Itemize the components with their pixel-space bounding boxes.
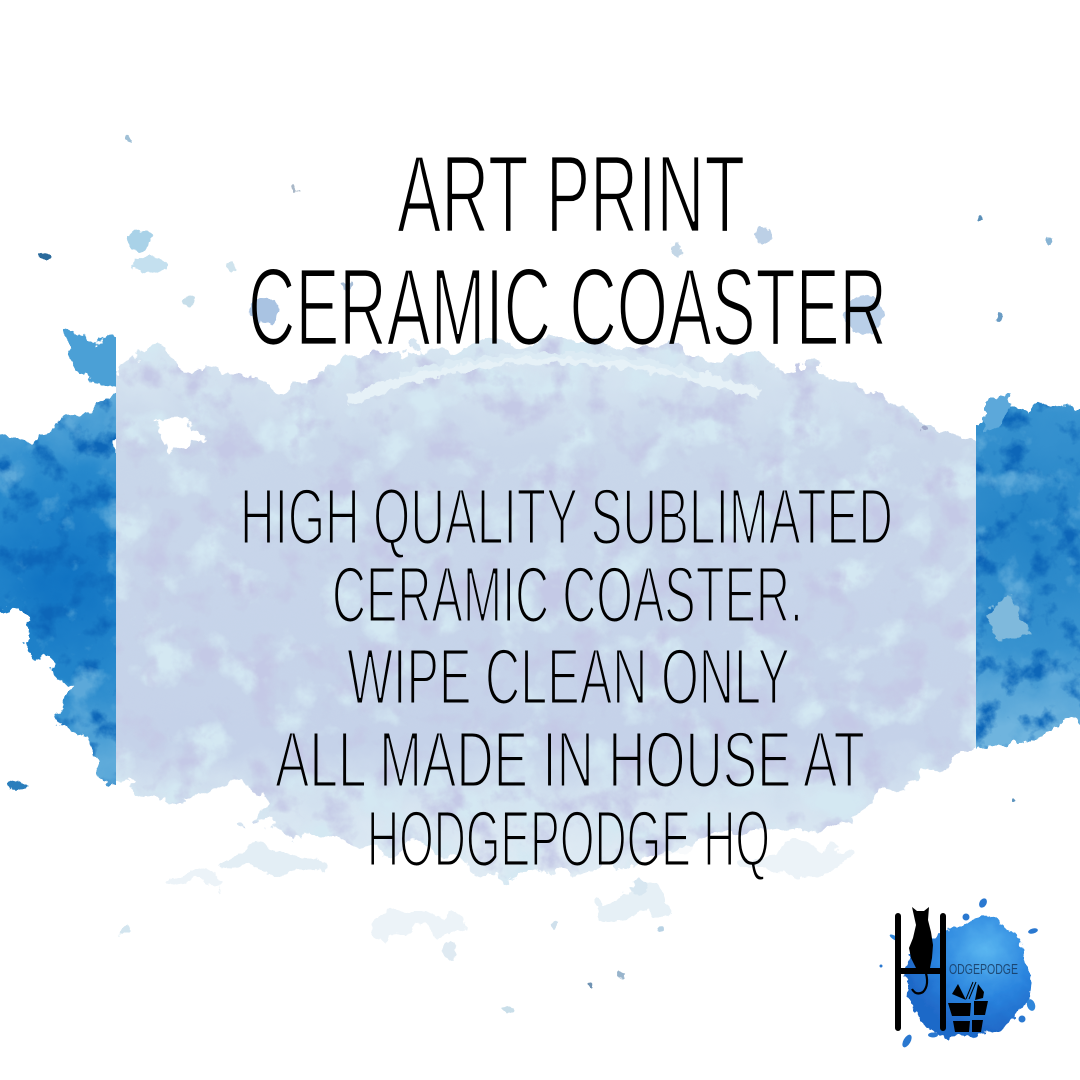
body text block: WIPE CLEAN ONLY [347, 632, 790, 721]
body text block [230, 472, 910, 883]
logo: Hodgepodge [880, 897, 1038, 1049]
title [240, 133, 900, 369]
watercolor splash: saturated left and right sides [0, 325, 1080, 800]
paint specks [9, 137, 1053, 1015]
white gaps and brush arcs [155, 418, 205, 452]
logo splash [880, 897, 1038, 1049]
title: ART PRINT [397, 133, 745, 256]
gift icon [948, 984, 988, 1032]
watercolor splash: washed centre behind panel [100, 345, 990, 935]
body text block: HODGEPODGE HQ [367, 794, 770, 883]
pale outer splashes [170, 846, 860, 935]
logo wordmark: ODGEPODGE [949, 962, 1018, 978]
letter H [898, 916, 943, 1028]
cat on the H [909, 907, 933, 968]
